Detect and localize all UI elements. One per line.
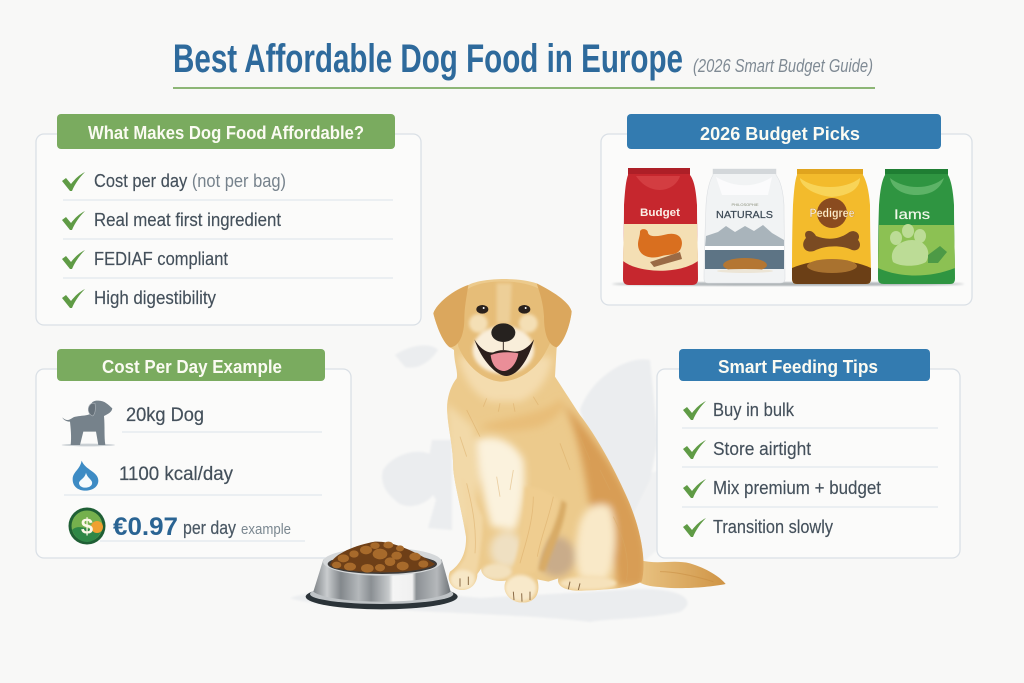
checklist: affordability: Real meat first ingredient bbox=[94, 209, 281, 230]
row: calories: 1100 kcal/day bbox=[119, 464, 233, 485]
heading: cost per day: Cost Per Day Example bbox=[102, 357, 282, 377]
checklist: affordability: High digestibility bbox=[94, 287, 217, 308]
checklist: affordability: Cost per day (not per bag) bbox=[94, 170, 286, 191]
rear paws bbox=[560, 577, 617, 590]
golden retriever dog bbox=[427, 273, 726, 607]
dog food bag: Pedigree: Pedigree bbox=[810, 208, 854, 220]
head bbox=[433, 281, 572, 382]
heading: what makes dog food affordable bbox=[57, 114, 395, 149]
checklist: affordability bbox=[62, 170, 393, 308]
row: dog weight bbox=[62, 401, 322, 446]
tail bbox=[638, 560, 726, 588]
nose bbox=[491, 323, 515, 342]
row: dog weight: 20kg Dog bbox=[126, 405, 204, 426]
heading: smart feeding tips: Smart Feeding Tips bbox=[718, 357, 878, 377]
haunch bbox=[576, 504, 615, 580]
chest bbox=[477, 437, 524, 530]
dog food bag: Naturals: NATURALS bbox=[716, 209, 773, 221]
food bowl with kibble bbox=[306, 542, 458, 609]
heading: smart feeding tips bbox=[679, 349, 930, 381]
checklist: tips: Transition slowly bbox=[713, 516, 834, 537]
dog food bag: Budget bbox=[623, 168, 698, 285]
row: price per day: per day bbox=[183, 518, 236, 538]
panel: cost per day example bbox=[36, 349, 351, 558]
checklist: affordability: FEDIAF compliant bbox=[94, 248, 228, 269]
fur silhouette and shading bbox=[434, 279, 644, 602]
checklist: tips: Buy in bulk bbox=[713, 399, 795, 420]
subtitle: (2026 Smart Budget Guide) bbox=[693, 55, 873, 76]
title bbox=[173, 37, 873, 81]
front left leg bbox=[456, 502, 484, 577]
side cream bbox=[447, 403, 480, 537]
checklist: tips bbox=[682, 399, 938, 537]
heading: budget picks bbox=[627, 114, 941, 149]
row: calories bbox=[64, 461, 322, 495]
ruff bbox=[458, 357, 552, 402]
dog food bag: Naturals bbox=[704, 169, 785, 283]
eyes bbox=[476, 305, 488, 314]
dog food bag: Budget: Budget bbox=[640, 207, 680, 219]
front right leg bbox=[512, 486, 548, 568]
heading: cost per day bbox=[57, 349, 325, 381]
back shading bbox=[563, 403, 646, 587]
ears bbox=[433, 285, 468, 347]
kibble pile bbox=[330, 542, 435, 573]
row: price per day: €0.97 bbox=[113, 513, 178, 541]
tongue bbox=[491, 352, 518, 371]
icon: dog silhouette bbox=[62, 401, 115, 446]
dog food bag: Iams: Iams bbox=[894, 206, 930, 222]
main heading: Best Affordable Dog Food in Europe bbox=[173, 37, 683, 81]
heading: budget picks: 2026 Budget Picks bbox=[700, 124, 860, 144]
checklist: tips: Store airtight bbox=[713, 438, 811, 459]
map of Europe backdrop bbox=[290, 345, 688, 622]
row: price per day: example bbox=[241, 521, 291, 538]
mouth bbox=[474, 339, 534, 376]
heading: what makes dog food affordable: What Makes Dog Food Affordable? bbox=[88, 123, 364, 143]
icon: coin: $ bbox=[81, 514, 93, 539]
leg shadow bbox=[538, 500, 567, 572]
panel: what makes dog food affordable bbox=[36, 114, 421, 325]
ruff shadow bbox=[486, 402, 563, 432]
icon: flame bbox=[73, 461, 98, 491]
dog food bag: Pedigree bbox=[792, 169, 871, 284]
fur strokes bbox=[460, 396, 618, 564]
lower belly bbox=[538, 537, 575, 577]
row: price per day bbox=[68, 508, 305, 544]
dog food bag: Naturals: PHILOSOPHIE bbox=[731, 202, 759, 207]
icon: coin bbox=[68, 508, 106, 544]
dog food bag: Iams bbox=[878, 169, 955, 284]
panel: 2026 budget picks bbox=[601, 114, 972, 305]
panel: smart feeding tips bbox=[657, 349, 960, 558]
checklist: tips: Mix premium + budget bbox=[713, 477, 881, 498]
